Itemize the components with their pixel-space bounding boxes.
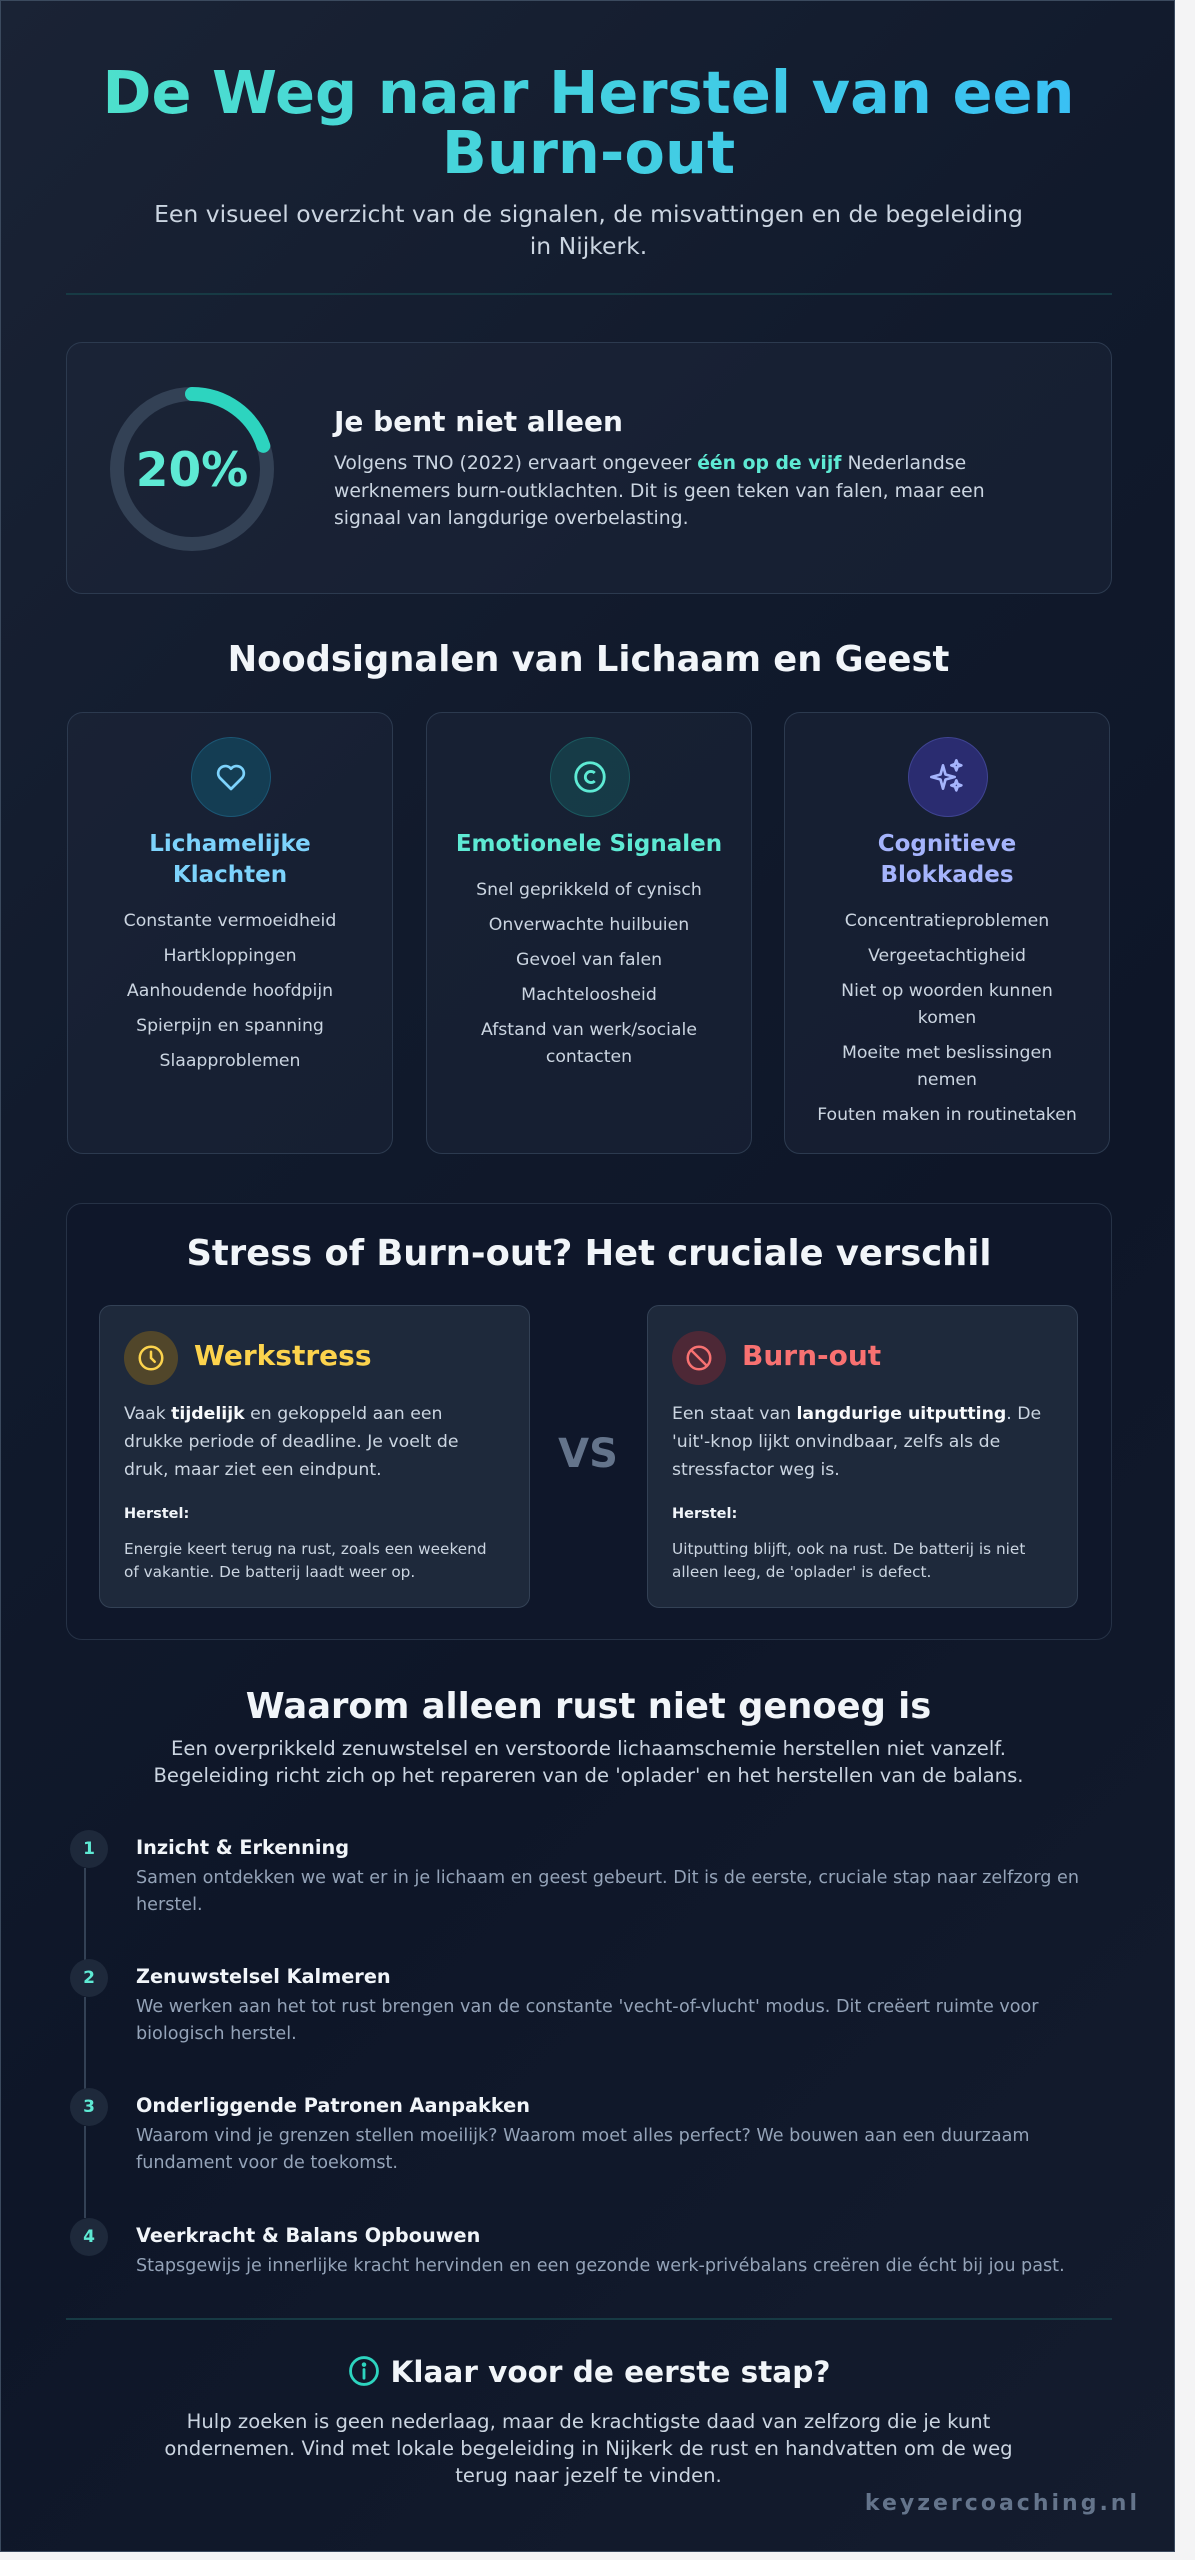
chart: 20% ring: 20% <box>136 443 248 498</box>
step 3: Waarom vind je grenzen stellen moeilijk? Waarom moet alles perfect? We bouwen aan een duurzaam <box>136 2126 1030 2146</box>
list: physical signals <box>124 911 336 1071</box>
list: emotional signals: Gevoel van falen <box>516 950 662 970</box>
step 1: Samen ontdekken we wat er in je lichaam en geest gebeurt. Dit is de eerste, cruciale stap naar zelfzorg en <box>136 1868 1079 1888</box>
chart: 20% ring <box>110 387 274 551</box>
heading: physical <box>149 831 311 888</box>
panel: emotional <box>426 712 752 1154</box>
panel: stress vs burnout <box>66 1203 1112 1640</box>
icon: prohibited <box>672 1331 726 1385</box>
list: physical signals: Constante vermoeidheid <box>124 911 336 931</box>
heading: not alone: Je bent niet alleen <box>334 405 623 438</box>
list: emotional signals: Afstand van werk/sociale <box>481 1020 697 1040</box>
text block: stat description: Volgens TNO (2022) ervaart ongeveer één op de vijf Nederlandse <box>334 453 966 474</box>
step 4: Veerkracht & Balans Opbouwen <box>136 2224 480 2247</box>
step 4: 4 <box>83 2227 95 2247</box>
list: cognitive signals: Moeite met beslissingen <box>842 1043 1052 1063</box>
step 3 <box>70 2088 1030 2173</box>
step 4: Stapsgewijs je innerlijke kracht hervinden en een gezonde werk-privébalans creëren die écht bij jou past. <box>136 2256 1065 2276</box>
list: cognitive signals <box>817 911 1077 1125</box>
step 2: biologisch herstel. <box>136 2024 297 2044</box>
title <box>1 63 1176 183</box>
heading: cognitive: Blokkades <box>880 862 1014 888</box>
text: burnout description: Een staat van langdurige uitputting. De <box>672 1404 1041 1424</box>
heading: comparison: Stress of Burn-out? Het cruciale verschil <box>187 1233 991 1274</box>
text: werkstress description: druk, maar ziet een eindpunt. <box>124 1460 382 1480</box>
step 2: 2 <box>83 1968 95 1988</box>
text block: CTA: Hulp zoeken is geen nederlaag, maar de krachtigste daad van zelfzorg die je kunt <box>187 2410 990 2433</box>
heading: CTA with info icon: Klaar voor de eerste stap? <box>391 2355 830 2389</box>
label: VS: VS <box>558 1431 618 1477</box>
heading: physical: Lichamelijke <box>149 831 311 857</box>
text block: intro: Een overprikkeld zenuwstelsel en verstoorde lichaamschemie herstellen niet vanzelf. <box>171 1737 1006 1760</box>
panel: physical <box>67 712 393 1154</box>
icon: emotion <box>550 737 630 817</box>
list: emotional signals: Onverwachte huilbuien <box>489 915 689 935</box>
text: werkstress recovery: of vakantie. De batterij laadt weer op. <box>124 1563 415 1581</box>
heading: cognitive <box>878 831 1016 888</box>
heading: werkstress: Werkstress <box>194 1339 372 1372</box>
step 2: Zenuwstelsel Kalmeren <box>136 1965 391 1988</box>
step 1: Inzicht & Erkenning <box>136 1836 349 1859</box>
list: emotional signals: Machteloosheid <box>521 985 657 1005</box>
text: werkstress description: drukke periode of deadline. Je voelt de <box>124 1432 459 1452</box>
list: cognitive signals: nemen <box>917 1070 977 1090</box>
title: De Weg naar Herstel van een <box>102 58 1074 127</box>
list: cognitive signals: Fouten maken in routinetaken <box>817 1105 1077 1125</box>
text block: CTA <box>164 2410 1013 2487</box>
card: werkstress <box>99 1305 530 1608</box>
text: werkstress description <box>124 1404 459 1480</box>
text: burnout description <box>672 1404 1041 1480</box>
text: burnout description: 'uit'-knop lijkt onvindbaar, zelfs als de <box>672 1432 1000 1452</box>
title: Burn-out <box>442 118 735 187</box>
card: werkstress: Herstel: <box>124 1506 189 1522</box>
text block: intro: Begeleiding richt zich op het repareren van de 'oplader' en het herstellen van de balans. <box>153 1764 1024 1787</box>
text: werkstress description: Vaak tijdelijk en gekoppeld aan een <box>124 1404 442 1424</box>
step 2 <box>70 1959 1039 2044</box>
step 3: fundament voor de toekomst. <box>136 2153 398 2173</box>
text: burnout description: stressfactor weg is. <box>672 1460 840 1480</box>
heading: physical: Klachten <box>173 862 287 888</box>
heading: cognitive: Cognitieve <box>878 831 1016 857</box>
text block: stat description: werknemers burn-outklachten. Dit is geen teken van falen, maar een <box>334 480 985 502</box>
list: cognitive signals: Concentratieproblemen <box>845 911 1049 931</box>
subtitle: in Nijkerk. <box>530 232 647 260</box>
text block: stat description: signaal van langdurige overbelasting. <box>334 508 689 529</box>
list: cognitive signals: komen <box>918 1008 976 1028</box>
list: emotional signals: contacten <box>546 1047 632 1067</box>
icon: heart <box>191 737 271 817</box>
text block: CTA: terug naar jezelf te vinden. <box>455 2464 722 2487</box>
heading: emotional: Emotionele Signalen <box>456 831 722 857</box>
list: emotional signals <box>476 880 702 1067</box>
subtitle: Een visueel overzicht van de signalen, de misvattingen en de begeleiding <box>154 200 1023 228</box>
list: cognitive signals: Niet op woorden kunnen <box>841 981 1053 1001</box>
subtitle <box>154 200 1023 260</box>
heading: signals: Noodsignalen van Lichaam en Geest <box>228 639 949 680</box>
panel: cognitive <box>784 712 1110 1154</box>
list: physical signals: Slaapproblemen <box>159 1051 300 1071</box>
text: werkstress recovery: Energie keert terug na rust, zoals een weekend <box>124 1540 487 1558</box>
text: burnout recovery: alleen leeg, de 'oplader' is defect. <box>672 1563 931 1581</box>
step 2: We werken aan het tot rust brengen van de constante 'vecht-of-vlucht' modus. Dit creëert ruimte voor <box>136 1997 1039 2017</box>
step 1: herstel. <box>136 1895 203 1915</box>
list: emotional signals: Snel geprikkeld of cynisch <box>476 880 702 900</box>
text block: intro <box>153 1737 1024 1787</box>
heading: why rest is not enough: Waarom alleen rust niet genoeg is <box>246 1686 931 1727</box>
step 3: 3 <box>83 2097 95 2117</box>
panel: statistic <box>66 342 1112 594</box>
text block: stat description <box>334 453 985 529</box>
list: physical signals: Spierpijn en spanning <box>136 1016 324 1036</box>
step 1 <box>70 1830 1079 1915</box>
step 3: Onderliggende Patronen Aanpakken <box>136 2094 530 2117</box>
icon: info <box>349 2356 379 2386</box>
card: burnout: Herstel: <box>672 1506 737 1522</box>
list: physical signals: Hartkloppingen <box>163 946 297 966</box>
step 4 <box>70 2218 1065 2276</box>
icon: clock <box>124 1331 178 1385</box>
list: physical signals: Aanhoudende hoofdpijn <box>127 981 333 1001</box>
list: cognitive signals: Vergeetachtigheid <box>868 946 1026 966</box>
text: werkstress recovery <box>124 1540 487 1581</box>
icon: sparkles <box>908 737 988 817</box>
text: burnout recovery: Uitputting blijft, ook na rust. De batterij is niet <box>672 1540 1025 1558</box>
text: burnout recovery <box>672 1540 1025 1581</box>
step 1: 1 <box>83 1839 95 1859</box>
text block: CTA: ondernemen. Vind met lokale begeleiding in Nijkerk de rust en handvatten om de weg <box>164 2437 1013 2460</box>
footer brand: keyzercoaching.nl <box>865 2491 1140 2516</box>
card: burnout <box>647 1305 1078 1608</box>
heading: burnout: Burn-out <box>742 1339 881 1372</box>
